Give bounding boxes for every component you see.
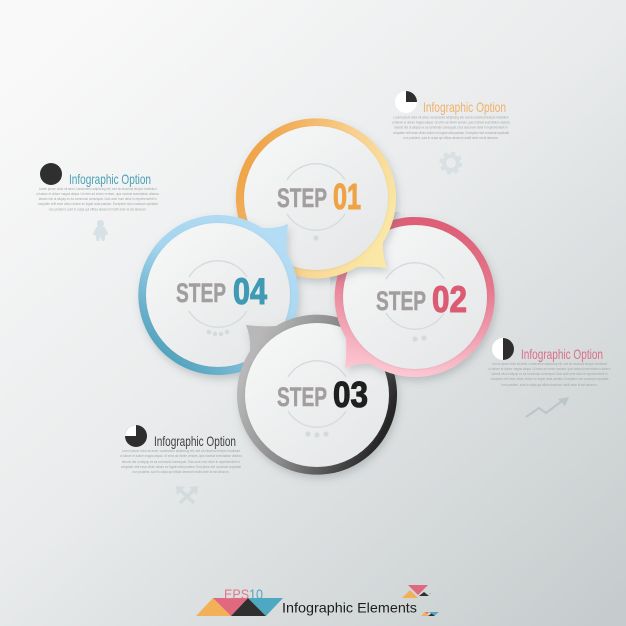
option text 01: laboris nisi ut aliquip ex ea commodo consequat. Duis aute irure dolor in reprehenderit in <box>394 126 508 130</box>
footer decorative triangles top <box>402 585 431 598</box>
footer logo triangles <box>196 598 283 616</box>
step 04 bubble: STEP <box>176 278 226 308</box>
step 01 tail overlapping step 02 <box>330 212 400 284</box>
option text 03: Lorem ipsum dolor sit amet, consectetur adipiscing elit, sed do eiusmod tempor incididunt <box>122 449 240 453</box>
option text 04: laboris nisi ut aliquip ex ea commodo consequat. Duis aute irure dolor in reprehenderit in <box>39 197 157 201</box>
option text 03: non proident, sunt in culpa qui officia deserunt mollit anim id est laborum. <box>132 470 230 474</box>
step 04 bubble <box>138 215 298 375</box>
pie icon: one quarter <box>395 91 417 113</box>
step 03 bubble: STEP <box>277 382 327 412</box>
option text 02: non proident, sunt in culpa qui officia deserunt mollit anim id est laborum. <box>502 383 598 387</box>
option heading 03: Infographic Option <box>154 433 236 449</box>
option block: step 01 <box>392 91 510 173</box>
option text 04: Lorem ipsum dolor sit amet, consectetur adipiscing elit, sed do eiusmod tempor incididunt <box>39 187 157 191</box>
option text 01: voluptate velit esse cillum dolore eu fugiat nulla pariatur. Excepteur sint occaecat cupidatat <box>393 131 509 135</box>
option text 01: Lorem ipsum dolor sit amet, consectetur adipiscing elit, sed do eiusmod tempor incididunt <box>394 116 508 120</box>
option text 04 <box>36 187 159 212</box>
step 02 bubble: 02 <box>432 279 467 320</box>
option heading 01: Infographic Option <box>423 99 506 115</box>
option text 02 <box>488 362 610 387</box>
pie icon: half <box>492 338 514 360</box>
pie icon: three quarters <box>125 425 147 447</box>
option text 01 <box>392 116 510 140</box>
option text 03: ut labore et dolore magna aliqua. Ut enim ad minim veniam, quis nostrud exercitation ullamco <box>120 454 242 458</box>
option text 03: laboris nisi ut aliquip ex ea commodo consequat. Duis aute irure dolor in reprehenderit in <box>122 460 240 464</box>
step 01 bubble: STEP <box>277 183 327 213</box>
option text 01: non proident, sunt in culpa qui officia deserunt mollit anim id est laborum. <box>404 136 498 140</box>
step 04 bubble: 04 <box>233 271 267 312</box>
option text 04: ut labore et dolore magna aliqua. Ut enim ad minim veniam, quis nostrud exercitation ullamco <box>36 192 159 196</box>
option text 04: non proident, sunt in culpa qui officia deserunt mollit anim id est laborum. <box>49 208 147 212</box>
option block: step 02 <box>488 338 610 417</box>
option block: step 04 <box>36 163 159 241</box>
icon: full dark circle <box>40 163 62 185</box>
footer title: Infographic Elements <box>282 600 417 616</box>
step 01 bubble <box>236 118 396 278</box>
step 02 bubble <box>335 217 495 377</box>
step 02 bubble: STEP <box>376 286 426 316</box>
option heading 04: Infographic Option <box>69 171 151 187</box>
option block: step 03 <box>120 425 242 503</box>
icon: crossed arrows <box>176 486 198 503</box>
EPS10 label: EPS10 <box>224 586 263 602</box>
step 01 bubble: 01 <box>333 176 361 217</box>
icon: gear <box>441 153 461 173</box>
option text 03: voluptate velit esse cillum dolore eu fugiat nulla pariatur. Excepteur sint occaecat cupidatat <box>121 465 241 469</box>
footer decorative triangles bottom <box>421 612 439 616</box>
icon: rising arrow <box>526 397 569 417</box>
option text 04: voluptate velit esse cillum dolore eu fugiat nulla pariatur. Excepteur sint occaecat cupidatat <box>38 202 158 206</box>
option text 01: ut labore et dolore magna aliqua. Ut enim ad minim veniam, quis nostrud exercitation ullamco <box>392 120 510 124</box>
step 03 bubble <box>237 315 397 475</box>
option text 03 <box>120 449 242 474</box>
step 03 bubble: 03 <box>333 374 368 415</box>
icon: person <box>92 220 108 241</box>
